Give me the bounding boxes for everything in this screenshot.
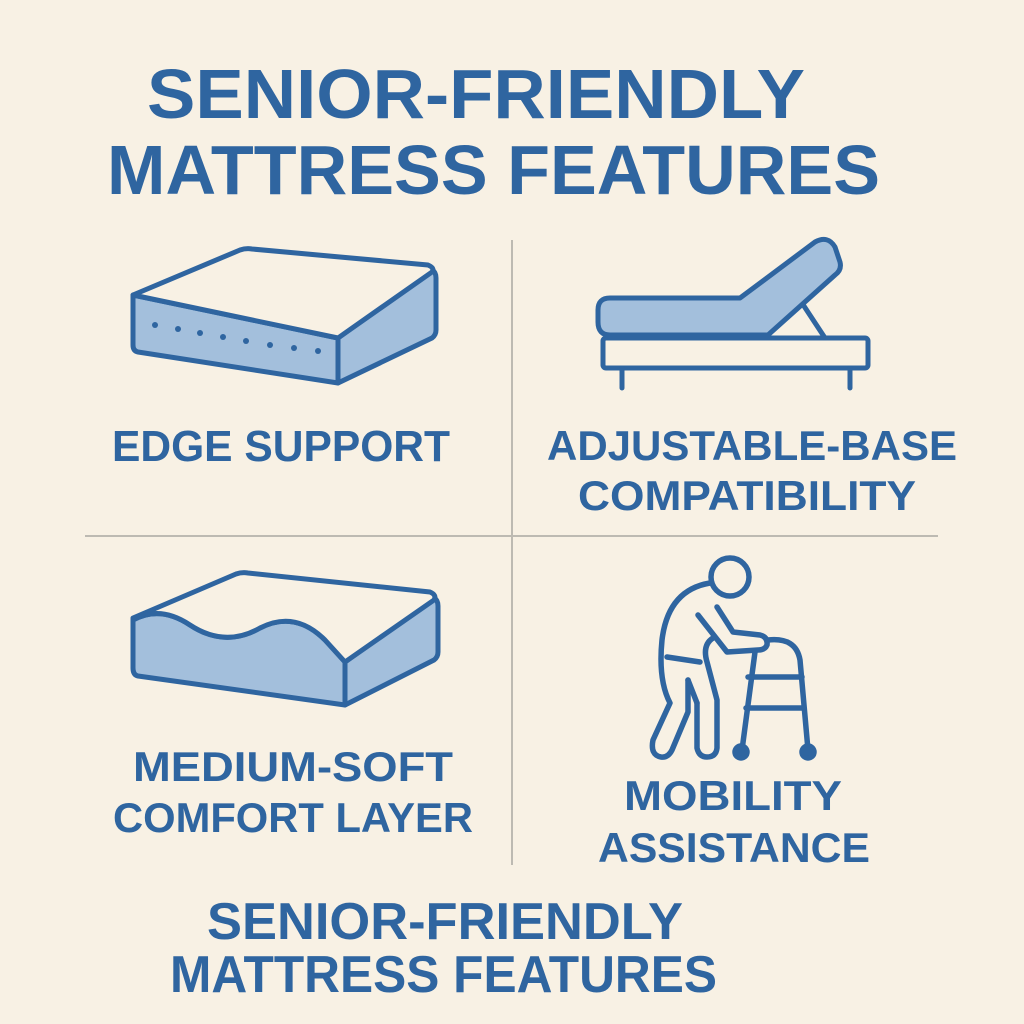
label: adjustable-base compatibility: [547, 422, 957, 519]
icon: mobility assistance walker: [652, 558, 814, 758]
title: [107, 55, 880, 209]
label: mobility assistance: ASSISTANCE: [598, 824, 870, 871]
icon: medium-soft mattress: [133, 573, 438, 705]
icon: adjustable base: [598, 239, 868, 388]
footer title: SENIOR-FRIENDLY: [207, 893, 683, 951]
label: mobility assistance: MOBILITY: [624, 772, 842, 819]
icon: edge support mattress: [133, 249, 436, 383]
label: medium-soft comfort layer: MEDIUM-SOFT: [133, 743, 453, 790]
label: medium-soft comfort layer: [113, 743, 473, 841]
footer title: [170, 893, 717, 1004]
label: medium-soft comfort layer: COMFORT LAYER: [113, 794, 473, 841]
label: adjustable-base compatibility: ADJUSTABLE-BASE: [547, 422, 957, 469]
label: mobility assistance: [598, 772, 870, 871]
title: MATTRESS FEATURES: [107, 131, 880, 209]
label: adjustable-base compatibility: COMPATIBILITY: [578, 472, 916, 519]
title: SENIOR-FRIENDLY: [147, 55, 805, 133]
label: edge support: EDGE SUPPORT: [112, 422, 450, 471]
footer title: MATTRESS FEATURES: [170, 946, 717, 1004]
